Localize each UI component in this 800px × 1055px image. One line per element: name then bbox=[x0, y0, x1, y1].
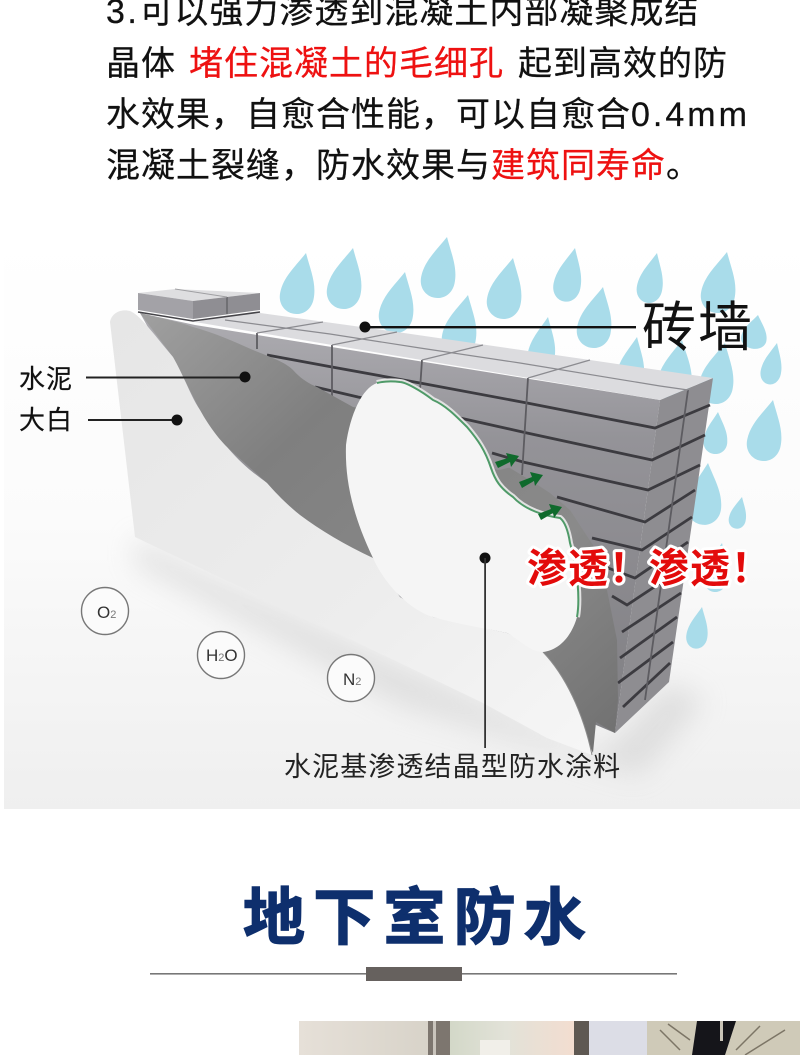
label: 大白: 大白 bbox=[19, 405, 73, 435]
gas bubble: H2O bbox=[198, 632, 244, 678]
small brick front bbox=[138, 293, 193, 319]
label: 水泥 bbox=[19, 364, 250, 394]
heading divider bbox=[150, 967, 677, 981]
line 2: 堵住混凝土的毛细孔 bbox=[189, 45, 504, 83]
line 4: 混凝土裂缝，防水效果与 bbox=[106, 147, 491, 185]
callout: 渗透！渗透！: 渗透！ bbox=[527, 547, 650, 591]
waterproof coating patch bbox=[346, 381, 578, 652]
wall top face bbox=[195, 312, 713, 400]
line 4: 建筑同寿命。 bbox=[491, 147, 701, 185]
label: waterproof coating: 水泥基渗透结晶型防水涂料 bbox=[284, 752, 621, 782]
gas bubble: N2: N2 bbox=[343, 670, 361, 689]
panel: wall section diagram bbox=[4, 233, 800, 809]
small brick side bbox=[193, 293, 260, 319]
callout: 渗透！渗透！: 渗透！ bbox=[649, 547, 772, 591]
top face joints bbox=[225, 320, 688, 390]
label: waterproof coating bbox=[284, 552, 621, 782]
wall front face bbox=[140, 313, 660, 733]
diagram background bbox=[4, 237, 800, 809]
small brick top bbox=[138, 289, 260, 301]
green coating outline bbox=[377, 381, 578, 617]
gas bubble: N2 bbox=[328, 654, 374, 702]
plaster edge bbox=[543, 652, 592, 755]
line 2: 起到高效的防 bbox=[518, 45, 728, 83]
line 2: 晶体 bbox=[106, 45, 176, 83]
label: 砖墙: 砖墙 bbox=[642, 298, 754, 358]
gas bubble: H2O: H2O bbox=[206, 646, 238, 665]
vertical mortar joints bbox=[257, 333, 688, 700]
line 3: 水效果，自愈合性能，可以自愈合0.4mm bbox=[106, 96, 750, 134]
photo: basement interior, cropped bbox=[299, 1021, 800, 1055]
wall floor shadow bbox=[135, 537, 705, 775]
cement layer bbox=[140, 313, 618, 753]
arrows: water penetration bbox=[495, 453, 562, 520]
label: 水泥: 水泥 bbox=[19, 364, 73, 394]
rain drops bbox=[276, 233, 790, 650]
gas bubble: O2 bbox=[82, 588, 128, 634]
plaster layer 大白 bbox=[110, 310, 592, 755]
text block: product description bbox=[106, 0, 750, 185]
wall end face bbox=[615, 378, 713, 733]
small top bricks bbox=[138, 289, 260, 321]
heading: 地下室防水: 地下室防水 bbox=[243, 884, 594, 953]
brick wall bbox=[140, 312, 713, 733]
gas bubble: O2: O2 bbox=[97, 603, 116, 622]
label: 大白 bbox=[19, 405, 182, 435]
label: 砖墙 bbox=[360, 298, 754, 358]
brick mortar lines bbox=[267, 355, 710, 707]
waterproof coating patch halo bbox=[377, 381, 578, 617]
